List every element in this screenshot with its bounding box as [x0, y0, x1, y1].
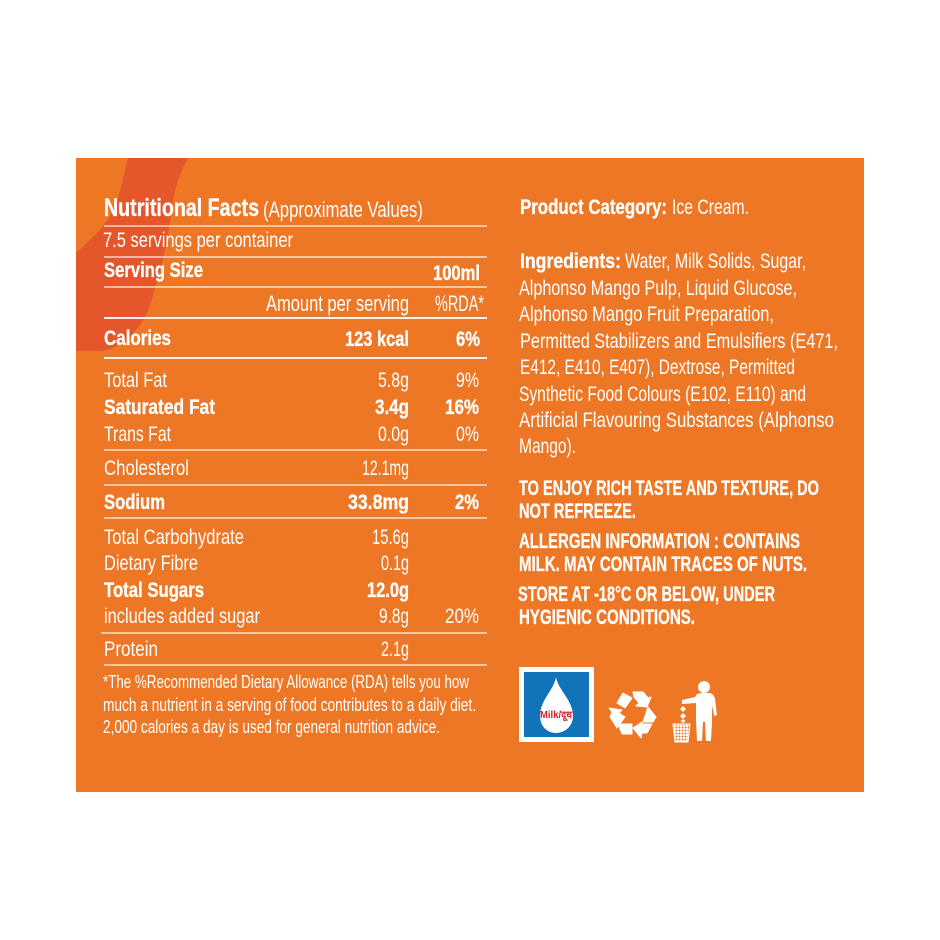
row: calories: 6% [456, 327, 480, 351]
column headers: %RDA* [435, 291, 484, 316]
row: dietary fibre: 0.1g [381, 551, 409, 575]
storage note: refreeze [519, 477, 819, 523]
row: trans fat [104, 422, 479, 446]
row: cholesterol [104, 456, 409, 480]
row: calories: Calories [104, 326, 171, 350]
ingredients text: Permitted Stabilizers and Emulsifiers (E471, [520, 330, 838, 353]
row: trans fat: 0.0g [378, 422, 409, 446]
allergen information [519, 530, 807, 576]
footnote: much a nutrient in a serving of food contributes to a daily diet. [103, 695, 476, 715]
row: sodium: 2% [455, 490, 479, 514]
ingredients text: Artificial Flavouring Substances (Alphonso [519, 409, 834, 432]
row: added sugar: includes added sugar [104, 604, 260, 628]
ingredients text: Alphonso Mango Fruit Preparation, [519, 303, 774, 326]
product category: Product Category: [520, 195, 667, 219]
row: added sugar: 9.8g [379, 604, 409, 628]
servings per container: 7.5 servings per container [103, 228, 293, 252]
storage note: refreeze: NOT REFREEZE. [519, 500, 636, 523]
row: total sugars: 12.0g [367, 578, 409, 602]
row: cholesterol: 12.1mg [362, 456, 409, 480]
row: total carbohydrate: 15.6g [372, 525, 409, 549]
row: trans fat: Trans Fat [104, 422, 171, 446]
row: dietary fibre: Dietary Fibre [104, 551, 198, 575]
storage note: refreeze: TO ENJOY RICH TASTE AND TEXTURE, DO [519, 477, 819, 500]
row: total carbohydrate: Total Carbohydrate [104, 525, 244, 549]
storage note: temperature: HYGIENIC CONDITIONS. [519, 606, 695, 629]
icon: recycling [609, 692, 656, 738]
row: total carbohydrate [104, 525, 409, 549]
storage note: temperature: STORE AT -18°C OR BELOW, UNDER [518, 583, 775, 606]
row: total sugars: Total Sugars [104, 578, 204, 602]
row: total fat: Total Fat [104, 368, 167, 392]
row: sodium: Sodium [104, 490, 165, 514]
icon: person using bin [673, 681, 717, 742]
heading: nutritional facts: Nutritional Facts [104, 194, 259, 222]
row: total fat: 5.8g [378, 368, 409, 392]
row: serving size: Serving Size [104, 258, 203, 282]
row: saturated fat: 3.4g [375, 395, 409, 419]
decorative blob [76, 158, 188, 351]
row: trans fat: 0% [456, 422, 479, 446]
heading: nutritional facts [104, 194, 423, 222]
row: saturated fat [104, 395, 479, 419]
row: total fat [104, 368, 479, 392]
icon: milk drop [519, 667, 594, 742]
panel: nutrition facts table [101, 194, 487, 737]
row: protein: Protein [104, 637, 158, 661]
row: total fat: 9% [456, 368, 479, 392]
row: sodium: 33.8mg [348, 490, 409, 514]
row: dietary fibre [104, 551, 409, 575]
allergen information: MILK. MAY CONTAIN TRACES OF NUTS. [519, 553, 807, 576]
column headers: Amount per serving [266, 291, 409, 316]
row: serving size: 100ml [433, 261, 480, 285]
row: added sugar [104, 604, 479, 628]
footnote: 2,000 calories a day is used for general nutrition advice. [103, 717, 440, 737]
row: added sugar: 20% [445, 604, 479, 628]
panel: orange background [76, 158, 864, 792]
footnote [103, 672, 476, 737]
storage note: temperature [518, 583, 775, 629]
row: cholesterol: Cholesterol [104, 456, 189, 480]
ingredients text: Ingredients: [520, 249, 621, 273]
icon: milk drop: Milk/दूध [540, 710, 573, 722]
row: serving size [104, 258, 480, 285]
ingredients text: Mango). [519, 435, 576, 458]
heading: nutritional facts: (Approximate Values) [263, 197, 423, 222]
row: total sugars [104, 578, 409, 602]
row: calories [104, 326, 480, 351]
row: saturated fat: Saturated Fat [104, 395, 215, 419]
product category: Ice Cream. [672, 196, 749, 219]
ingredients text: E412, E410, E407), Dextrose, Permitted [520, 356, 795, 379]
ingredients text: Alphonso Mango Pulp, Liquid Glucose, [519, 277, 797, 300]
ingredients text [519, 249, 838, 458]
ingredients text: Water, Milk Solids, Sugar, [625, 250, 806, 273]
allergen information: ALLERGEN INFORMATION : CONTAINS [519, 530, 800, 553]
row: calories: 123 kcal [345, 327, 409, 351]
row: protein: 2.1g [381, 637, 409, 661]
row: protein [104, 637, 409, 661]
row: saturated fat: 16% [445, 395, 479, 419]
footnote: *The %Recommended Dietary Allowance (RDA) tells you how [103, 672, 470, 692]
row: sodium [104, 490, 479, 514]
ingredients text: Synthetic Food Colours (E102, E110) and [519, 383, 806, 406]
